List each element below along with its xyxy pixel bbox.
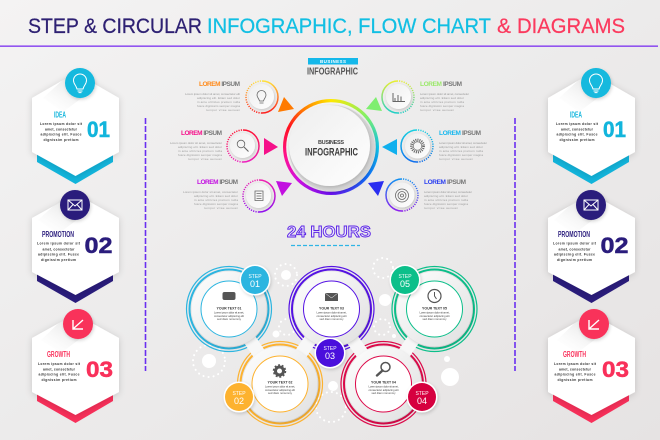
icon: bulb node xyxy=(246,81,278,113)
text block: left top xyxy=(185,81,240,112)
chart: step rings xyxy=(186,266,477,426)
callout: step 02 badge: STEP xyxy=(232,391,246,397)
panel: step 03: sed diam nonummy xyxy=(320,317,344,321)
panel: idea hexagon xyxy=(32,68,119,184)
text block: right top: in ante ultricies pretium nulla xyxy=(420,100,464,104)
text block: right middle: Lorem ipsum dolor sit amet, consectetur xyxy=(439,141,487,145)
panel: growth hexagon right: GROWTH xyxy=(563,350,586,359)
panel: step 04: Lorem ipsum dolor sit amet, xyxy=(368,384,399,388)
panel: idea hexagon: Lorem ipsum dolor sit xyxy=(40,122,83,126)
title xyxy=(28,14,625,38)
chart: central rainbow hub xyxy=(280,96,382,198)
panel: step 05 xyxy=(397,272,472,346)
text block: right bottom: Lorem ipsum dolor sit amet, consectetur xyxy=(424,190,472,194)
panel: growth hexagon: amet, consectetur xyxy=(43,368,76,372)
panel: step 04: YOUR TEXT 04 xyxy=(371,380,396,384)
heading: business infographic label: INFOGRAPHIC xyxy=(307,66,358,78)
panel: growth hexagon: GROWTH xyxy=(47,350,70,359)
title: & xyxy=(497,14,511,38)
panel: step 02: sed diam nonummy xyxy=(268,391,293,395)
panel: growth hexagon xyxy=(32,309,119,423)
panel: step 05: YOUR TEXT 05 xyxy=(422,306,447,310)
panel: growth hexagon: 03 xyxy=(86,357,113,382)
text block: right bottom: adipiscing elit. Etiam sed dolor xyxy=(424,194,468,198)
heading: business infographic label xyxy=(307,58,358,78)
panel: promotion hexagon: adipiscing elit. Fusce xyxy=(38,252,79,256)
panel: promotion hexagon right: PROMOTION xyxy=(558,230,590,239)
callout: step 03 badge: 03 xyxy=(325,351,335,361)
panel: step 01 xyxy=(192,272,266,346)
panel: idea hexagon: IDEA xyxy=(54,110,66,120)
text block: right middle: LOREM IPSUM xyxy=(439,130,481,137)
panel: idea hexagon: adipiscing elit. Fusce xyxy=(40,132,82,136)
panel: idea hexagon right xyxy=(548,68,635,184)
callout: step 05 badge: STEP xyxy=(398,274,412,280)
panel: step 02: consectetur adipiscing elit xyxy=(265,388,295,392)
panel: step 05: sed diam nonummy xyxy=(422,317,447,321)
text block: left middle xyxy=(170,130,222,161)
panel: growth hexagon: Lorem ipsum dolor sit xyxy=(38,362,81,366)
text block: left bottom: fusce dignissim semper magna xyxy=(194,202,238,206)
callout: step 01 badge xyxy=(240,264,270,296)
panel: step 04: consectetur adipiscing elit xyxy=(368,388,399,392)
chart: central rainbow hub: BUSINESS xyxy=(318,140,344,146)
heading: business infographic label: BUSINESS xyxy=(320,59,346,64)
panel: step 01: Lorem ipsum dolor sit amet, xyxy=(214,310,244,314)
panel: promotion hexagon right: Lorem ipsum dolor sit xyxy=(553,242,597,246)
text block: right top: fusce dignissim semper magna xyxy=(420,104,464,108)
panel: idea hexagon: amet, consectetur xyxy=(45,128,78,132)
divider: dashed lines xyxy=(146,118,515,371)
text block: left middle: adipiscing elit. Etiam sed dolor xyxy=(178,145,222,149)
text block: right bottom: tempor vitae aenean xyxy=(424,206,458,210)
text block: right bottom: fusce dignissim semper magna xyxy=(424,202,468,206)
panel: growth hexagon: adipiscing elit. Fusce xyxy=(38,372,80,376)
panel: step 05: Lorem ipsum dolor sit amet, xyxy=(420,310,450,314)
icon: bar chart node xyxy=(382,81,414,113)
text block: left bottom: in ante ultricies pretium nulla xyxy=(194,198,238,202)
panel: step 04: sed diam nonummy xyxy=(372,391,396,395)
text block: left top: LOREM IPSUM xyxy=(199,81,240,88)
panel: step 01: sed diam nonummy xyxy=(217,317,242,321)
panel: promotion hexagon right: dignissim pretium xyxy=(557,258,592,262)
panel: step 04 xyxy=(346,346,421,422)
callout: step 01 badge: STEP xyxy=(248,274,262,280)
text block: left bottom: LOREM IPSUM xyxy=(197,179,238,186)
arrow: purple xyxy=(276,181,292,196)
text block: right middle: tempor vitae aenean xyxy=(439,157,473,161)
text block: right top: adipiscing elit. Etiam sed dolor xyxy=(420,96,464,100)
panel: growth hexagon: dignissim pretium xyxy=(42,378,76,382)
callout: step 04 badge: STEP xyxy=(415,391,429,397)
text block: left bottom xyxy=(183,179,238,210)
panel: idea hexagon: 01 xyxy=(87,117,110,142)
decorative dots xyxy=(193,258,459,422)
arrow: blue xyxy=(368,181,384,196)
panel: right hexagon column xyxy=(548,68,635,423)
callout: step 03 badge xyxy=(314,338,346,368)
panel: step 03: Lorem ipsum dolor sit amet, xyxy=(316,310,347,314)
text block: right bottom: LOREM IPSUM xyxy=(424,179,466,186)
arrow: cyan xyxy=(382,139,397,155)
panel: left hexagon column xyxy=(32,68,119,423)
text block: left bottom: Lorem ipsum dolor sit amet, consectetur xyxy=(183,190,238,194)
text block: left top: Lorem ipsum dolor sit amet, consectetur elit xyxy=(185,92,240,96)
panel: promotion hexagon right xyxy=(548,190,635,303)
panel: promotion hexagon xyxy=(32,190,119,303)
arrow: green xyxy=(366,97,382,111)
panel: step 02: Lorem ipsum dolor sit amet, xyxy=(265,384,295,388)
panel: step 02: YOUR TEXT 02 xyxy=(268,380,292,384)
text block: right top: tempor vitae aenean xyxy=(420,108,454,112)
callout: step 01 badge: 01 xyxy=(250,279,260,289)
connectors between steps xyxy=(238,322,425,370)
icon: search node xyxy=(227,130,259,162)
icon: gear node xyxy=(401,130,433,162)
panel: growth hexagon right: amet, consectetur xyxy=(559,368,592,372)
text block: right middle: adipiscing elit. Etiam sed dolor xyxy=(439,145,483,149)
text block: right bottom: in ante ultricies pretium nulla xyxy=(424,198,468,202)
panel: promotion hexagon: Lorem ipsum dolor sit xyxy=(37,242,81,246)
callout: step 04 badge: 04 xyxy=(417,396,427,406)
panel: idea hexagon: dignissim pretium xyxy=(44,138,78,142)
text block: right top: Lorem ipsum dolor sit amet, consectetur xyxy=(420,92,469,96)
panel: promotion hexagon right: amet, consectetur xyxy=(558,248,591,252)
panel: step 02 xyxy=(242,346,318,422)
text block: left top: adipiscing elit. Etiam sed dolor xyxy=(197,96,240,100)
icon: checklist node xyxy=(243,180,275,212)
title: DIAGRAMS xyxy=(517,14,625,38)
arrow: orange xyxy=(278,97,294,112)
panel: promotion hexagon: dignissim pretium xyxy=(41,258,76,262)
text block: left middle: LOREM IPSUM xyxy=(181,130,222,137)
text block: left middle: in ante ultricies pretium nulla xyxy=(178,149,222,153)
panel: growth hexagon right: adipiscing elit. Fusce xyxy=(554,372,596,376)
panel: idea hexagon right: IDEA xyxy=(570,110,582,120)
panel: growth hexagon right: 03 xyxy=(602,357,629,382)
heading: 24 hours: 24 HOURS xyxy=(287,224,371,241)
arrow: pink xyxy=(264,138,278,155)
panel: step 03: YOUR TEXT 03 xyxy=(319,306,344,310)
panel: step 01: consectetur adipiscing elit xyxy=(214,314,244,318)
text block: left bottom: adipiscing elit. Etiam sed dolor xyxy=(194,194,238,198)
panel: growth hexagon right: dignissim pretium xyxy=(558,378,592,382)
text block: left middle: Lorem ipsum dolor sit amet, consectetur xyxy=(170,141,222,145)
text block: right top: LOREM IPSUM xyxy=(420,81,462,88)
callout: step 05 badge: 05 xyxy=(400,279,410,289)
chart: central rainbow hub: INFOGRAPHIC xyxy=(305,146,358,158)
text block: left middle: tempor vitae aenean xyxy=(188,157,222,161)
callout: step 04 badge xyxy=(406,382,438,412)
text block: left middle: fusce dignissim semper magna xyxy=(178,153,222,157)
callout: step 05 badge xyxy=(390,264,420,296)
panel: step 03: consectetur adipiscing elit xyxy=(316,314,347,318)
title: INFOGRAPHIC, FLOW CHART xyxy=(207,14,491,38)
panel: step 01: YOUR TEXT 01 xyxy=(217,306,241,310)
text block: right middle: fusce dignissim semper magna xyxy=(439,153,483,157)
icon: target node xyxy=(386,179,418,211)
callout: step 02 badge xyxy=(224,382,254,412)
text block: right bottom xyxy=(424,179,472,210)
panel: promotion hexagon right: adipiscing elit. Fusce xyxy=(554,252,595,256)
panel: step 03 xyxy=(294,272,369,346)
panel: promotion hexagon: 02 xyxy=(84,233,112,258)
callout: step 03 badge: STEP xyxy=(323,346,337,352)
panel: growth hexagon right: Lorem ipsum dolor sit xyxy=(554,362,597,366)
panel: idea hexagon right: Lorem ipsum dolor sit xyxy=(556,122,599,126)
text block: left top: fusce dignissim semper magna xyxy=(197,104,240,108)
panel: idea hexagon right: amet, consectetur xyxy=(561,128,594,132)
panel: step 05: consectetur adipiscing elit xyxy=(420,314,450,318)
panel: promotion hexagon: amet, consectetur xyxy=(42,248,75,252)
text block: right middle xyxy=(439,130,487,161)
panel: idea hexagon right: adipiscing elit. Fusce xyxy=(556,132,598,136)
text block: left bottom: tempor vitae aenean xyxy=(204,206,238,210)
panel: idea hexagon right: dignissim pretium xyxy=(560,138,594,142)
title: STEP & CIRCULAR xyxy=(28,14,202,38)
text block: right middle: in ante ultricies pretium nulla xyxy=(439,149,483,153)
panel: promotion hexagon right: 02 xyxy=(600,233,628,258)
panel: idea hexagon right: 01 xyxy=(603,117,626,142)
callout: step 02 badge: 02 xyxy=(234,396,244,406)
text block: right top xyxy=(420,81,469,112)
text block: left top: in ante ultricies pretium nulla xyxy=(197,100,240,104)
text block: left top: tempor vitae aenean xyxy=(206,108,240,112)
panel: growth hexagon right xyxy=(548,309,635,423)
panel: promotion hexagon: PROMOTION xyxy=(42,230,74,239)
